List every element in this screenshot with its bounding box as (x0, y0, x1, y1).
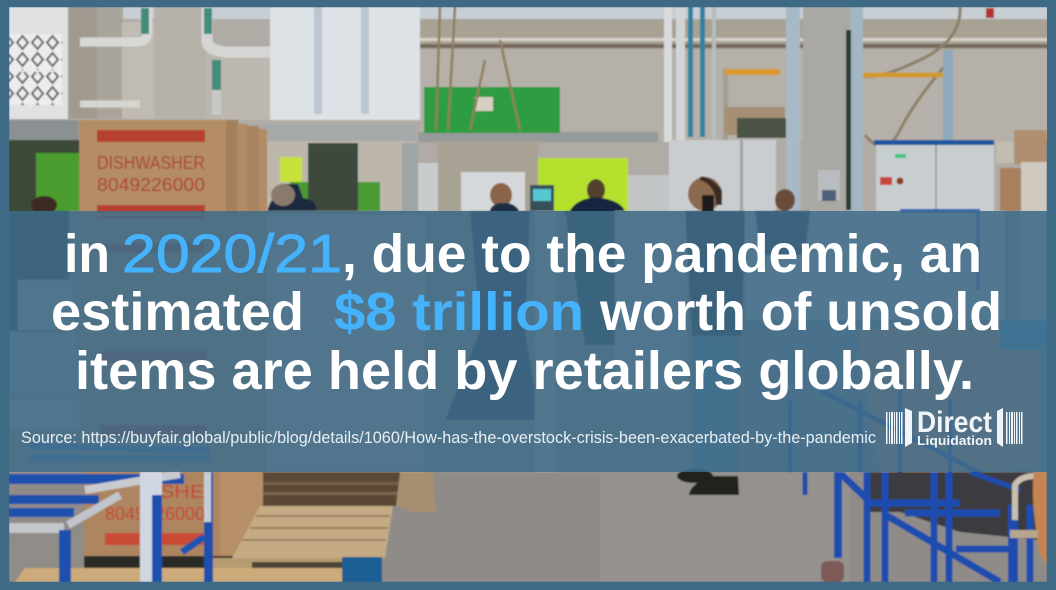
air handling unit (9, 7, 98, 140)
wooden pallets (15, 506, 393, 582)
stacked cardboard (263, 472, 436, 512)
overhead hoses (863, 7, 990, 146)
icon: right barcode (997, 408, 1022, 447)
control cabinet (874, 140, 994, 216)
headline (51, 224, 1002, 401)
dark area behind right cart (868, 472, 1040, 540)
blue cart left (9, 472, 213, 582)
lower box label: 8049226000 (105, 504, 205, 524)
headline line 2: worth of unsold (599, 282, 1002, 342)
headline line 2: estimated (51, 282, 304, 342)
dishwasher box top: DISHWASHER (97, 153, 205, 173)
white duct panel (270, 7, 420, 120)
cart handle and orange box (1010, 472, 1047, 565)
mid-section scene under banner (9, 211, 1047, 473)
lower box label: SHE (160, 482, 204, 502)
dark machine floor (9, 139, 80, 212)
logo: Direct Liquidation (886, 406, 1022, 448)
caster wheel (821, 561, 844, 582)
translucent banner (9, 211, 1047, 472)
dishwasher box lower (83, 472, 264, 569)
dishwasher box top (79, 120, 267, 216)
pipes and uprights (664, 7, 787, 143)
workers (31, 177, 795, 216)
green machine (424, 87, 560, 133)
lower box label (105, 484, 204, 520)
concrete pillar and racks (786, 7, 863, 212)
logo wordmark: Liquidation (917, 433, 992, 448)
blue cart right (805, 472, 1030, 582)
floor (9, 472, 1047, 582)
concrete columns and pipes (80, 7, 272, 120)
steel beam (245, 124, 415, 141)
upper wall (9, 7, 1047, 217)
stacked boxes at right (996, 130, 1047, 216)
grey cabinet (669, 140, 776, 216)
dishwasher box top: 8049226000 (97, 175, 205, 195)
source citation: Source: https://buyfair.global/public/blog/details/1060/How-has-the-overstock-crisis-been-exacerbated-by-the-pandemic (21, 428, 876, 447)
lime injection machine (538, 158, 628, 216)
headline line 1: in (64, 224, 110, 284)
headline line 3: items are held by retailers globally. (75, 341, 974, 401)
icon: left barcode (886, 408, 912, 447)
headline line 1: , due to the pandemic, an (342, 224, 982, 284)
shoes (677, 469, 739, 495)
headline line 1: 2020/21 (122, 224, 342, 284)
logo wordmark: Direct (917, 406, 992, 439)
headline line 2: $8 trillion (334, 282, 584, 342)
